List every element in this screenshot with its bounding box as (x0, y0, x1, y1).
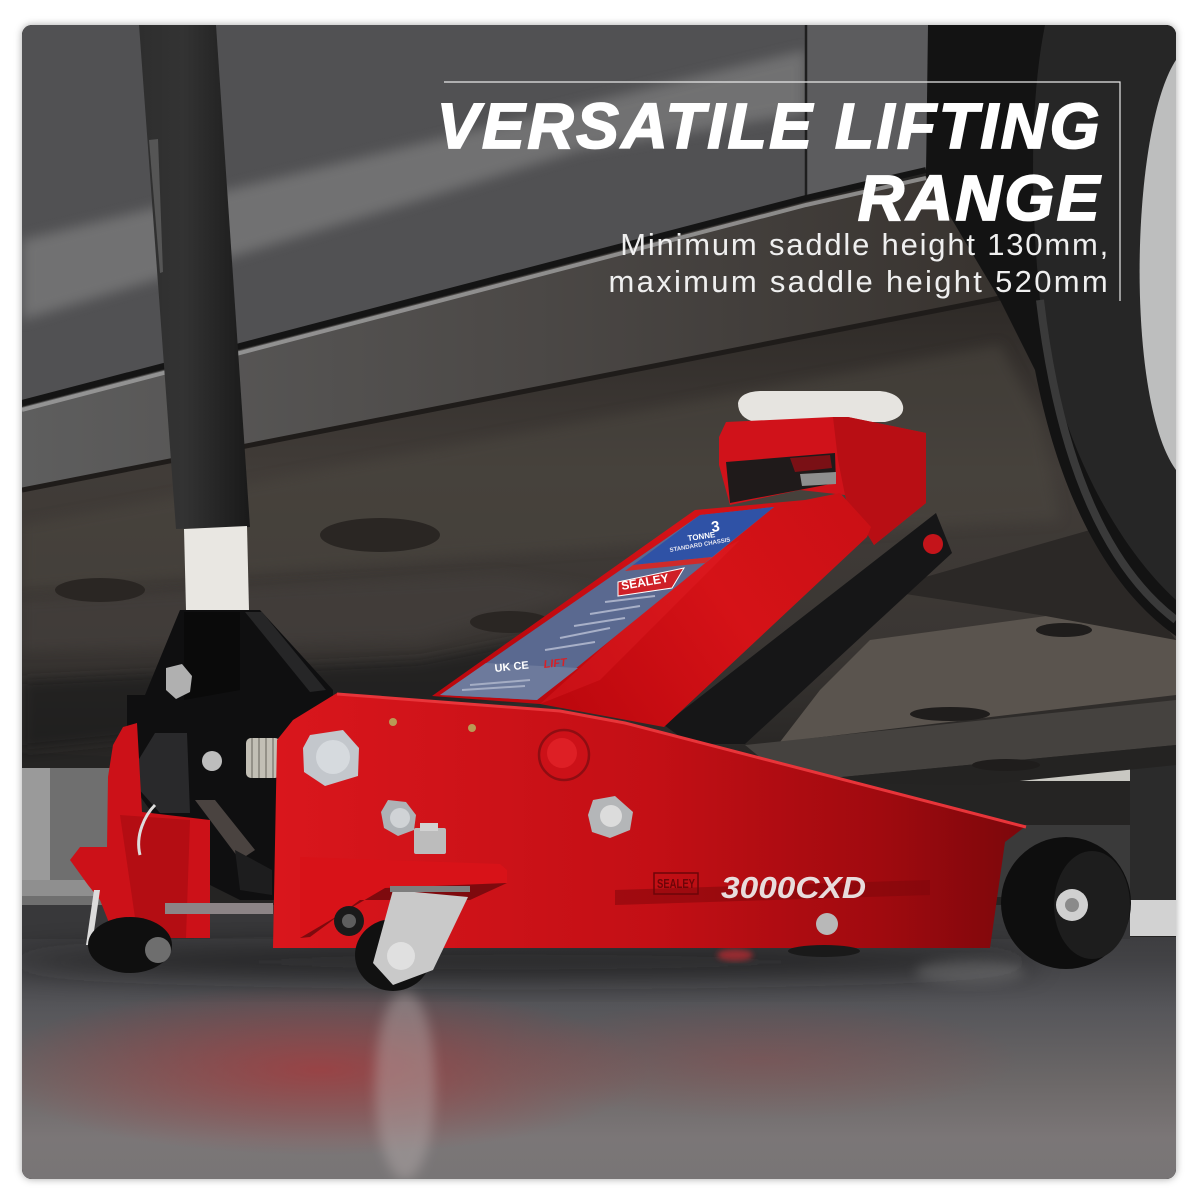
jack pump housing and black bracket (127, 610, 333, 900)
heading: VERSATILE LIFTING (437, 90, 1102, 162)
jack saddle head (719, 391, 926, 545)
label: TONNE (687, 530, 717, 543)
model badge: 3000CXD (721, 870, 866, 905)
model badge (654, 870, 866, 905)
subheading text: Minimum saddle height 130mm, (620, 227, 1110, 262)
label: LIFT (543, 656, 569, 671)
rear wheel (788, 837, 1131, 969)
jack black lift link (664, 513, 952, 744)
heading (437, 90, 1102, 234)
bolts (303, 718, 838, 935)
jack handle (139, 25, 250, 610)
label: STANDARD CHASSIS (669, 537, 731, 554)
subheading text: maximum saddle height 520mm (609, 264, 1110, 299)
car front tyre and wheel arch (926, 25, 1176, 636)
heading: RANGE (858, 162, 1102, 234)
car sill (22, 176, 1000, 490)
jack main body (273, 693, 1026, 948)
floor (0, 905, 1176, 1180)
car underbody (22, 300, 1176, 790)
label: UK CE (494, 659, 529, 675)
label: 3 (710, 518, 721, 536)
car door panel (22, 25, 930, 403)
model badge: SEALEY (657, 876, 695, 891)
label: SEALEY (620, 571, 670, 593)
jack arm with instruction label (432, 493, 871, 727)
subheading text (609, 227, 1110, 299)
label (440, 507, 774, 700)
front castor wheel (334, 886, 470, 991)
jack rear frame (70, 723, 273, 973)
